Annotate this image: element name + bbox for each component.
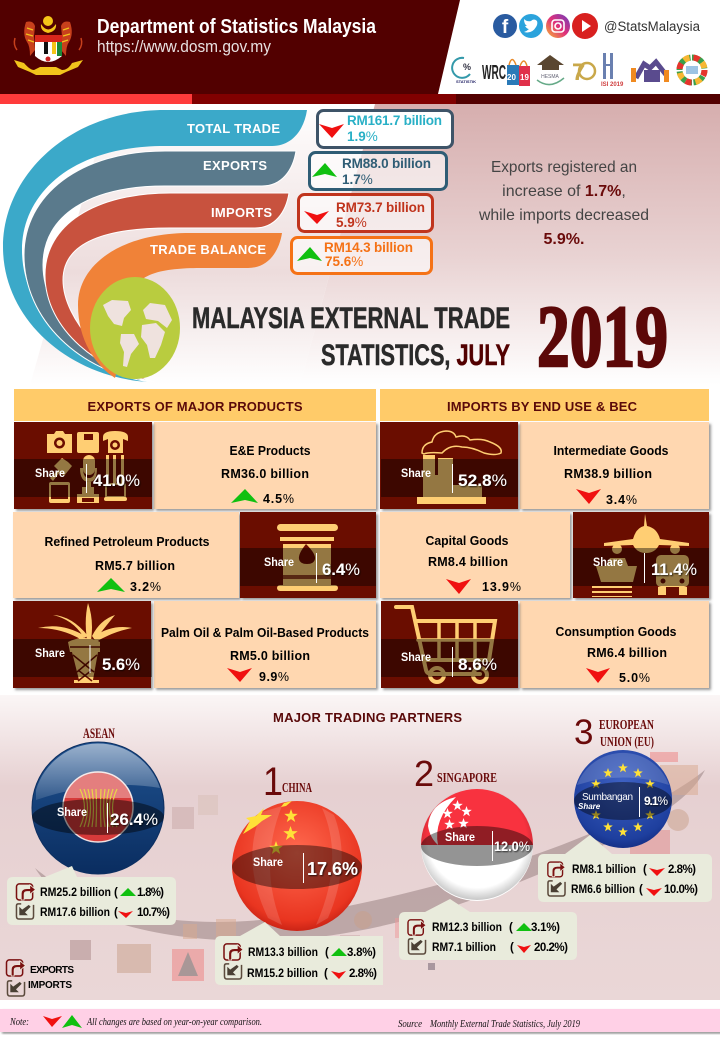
card: consumption goods: RM6.4 billion	[587, 646, 667, 660]
summary text: 5.9%.	[544, 231, 584, 248]
stat box: total trade: 1.9%	[347, 129, 378, 144]
card: consumption goods: Consumption Goods	[556, 625, 677, 639]
partner: European Union	[538, 713, 712, 902]
callout: Singapore trade: 20.2%)	[534, 942, 568, 954]
callout: EU trade: RM8.1 billion	[572, 864, 636, 876]
heading: exports of major products	[14, 389, 376, 421]
callout: EU trade: (	[639, 884, 643, 896]
label: imports: IMPORTS	[211, 205, 272, 220]
card: refined petroleum: RM5.7 billion	[95, 559, 175, 573]
sphere: ASEAN flag: 26.4%	[110, 810, 158, 829]
icon: plane, ship and bus	[592, 514, 689, 597]
stat box: imports: RM73.7 billion	[336, 200, 425, 215]
legend: exports and imports: EXPORTS	[30, 965, 74, 976]
callout: Singapore trade	[399, 899, 577, 960]
sphere: Singapore flag	[421, 788, 533, 901]
icon: electronics	[47, 431, 128, 503]
stat box: exports	[310, 152, 446, 190]
card: capital goods: RM8.4 billion	[428, 555, 508, 569]
partner: China	[215, 760, 383, 985]
legend: exports and imports: IMPORTS	[28, 980, 72, 991]
card: E&E products: 41.0%	[93, 471, 140, 490]
heading: exports of major products: EXPORTS OF MAJOR PRODUCTS	[88, 399, 303, 414]
card: refined petroleum: Refined Petroleum Products	[44, 535, 210, 549]
icon: shopping cart	[396, 607, 495, 682]
card: intermediate goods: Share	[401, 468, 431, 480]
callout: Singapore trade: RM7.1 billion	[432, 942, 496, 954]
partner logos: 7	[572, 59, 585, 86]
card: consumption goods: 5.0%	[619, 671, 650, 685]
stat box: imports: 5.9%	[336, 215, 367, 230]
partner logos	[452, 53, 704, 88]
stat box: imports	[298, 194, 432, 232]
callout: China trade: (	[325, 947, 329, 959]
header url: https://www.dosm.gov.my	[97, 38, 272, 56]
title year: 2019	[537, 289, 668, 386]
card: consumption goods: Share	[401, 652, 431, 664]
sphere: EU flag: 9.1%	[644, 794, 668, 808]
partner: European Union: UNION (EU)	[600, 735, 654, 750]
card: intermediate goods: Intermediate Goods	[554, 444, 669, 458]
card: refined petroleum: Share	[264, 557, 294, 569]
legend: exports and imports	[6, 960, 74, 996]
heading: imports by end use: IMPORTS BY END USE & BEC	[447, 399, 638, 414]
stat box: trade balance	[292, 238, 432, 274]
callout: ASEAN trade: (	[114, 907, 118, 919]
header band	[0, 0, 720, 104]
partner: ASEAN: ASEAN	[83, 726, 115, 742]
card: refined petroleum: 3.2%	[130, 580, 161, 594]
card: E&E products: E&E Products	[230, 444, 311, 458]
callout: ASEAN trade: 10.7%)	[137, 907, 170, 919]
label: exports: EXPORTS	[203, 158, 267, 173]
stat box: trade balance: 75.6%	[325, 254, 363, 269]
card: palm oil: RM5.0 billion	[230, 649, 310, 663]
summary text: increase of 1.7%,	[502, 183, 626, 200]
card: capital goods: 13.9%	[482, 580, 521, 594]
callout: Singapore trade: 3.1%)	[531, 922, 560, 934]
callout: Singapore trade: (	[510, 942, 514, 954]
sphere: China flag: 17.6%	[307, 859, 358, 879]
sphere: China flag	[232, 801, 362, 931]
card: refined petroleum: 6.4%	[322, 560, 360, 579]
footer note bar	[0, 1009, 720, 1032]
icon: globe	[90, 277, 180, 379]
card: palm oil: Palm Oil & Palm Oil-Based Products	[161, 626, 369, 640]
band: total trade	[3, 110, 307, 382]
summary text: Exports registered an	[491, 159, 637, 176]
summary text	[478, 159, 649, 248]
band: exports	[24, 151, 296, 382]
stat box: total trade: RM161.7 billion	[347, 113, 442, 128]
partner logos: WRC	[482, 62, 506, 84]
sphere: ASEAN flag: Share	[57, 807, 87, 819]
partner logos: %	[463, 62, 471, 72]
label: total trade: TOTAL TRADE	[187, 121, 280, 136]
callout: EU trade: (	[643, 864, 647, 876]
stat box: exports: RM88.0 billion	[342, 156, 431, 171]
callout: EU trade: 10.0%)	[664, 884, 698, 896]
card: E&E products: RM36.0 billion	[221, 467, 309, 481]
partner: Singapore: 2	[414, 753, 434, 794]
social media icons: f	[502, 17, 509, 38]
stat box: trade balance: RM14.3 billion	[324, 240, 413, 255]
social media icons	[493, 13, 598, 39]
card: consumption goods: 8.6%	[458, 655, 497, 674]
callout: China trade: RM15.2 billion	[247, 968, 318, 980]
card: E&E products: 4.5%	[263, 492, 294, 506]
sphere: Singapore flag: 12.0%	[494, 838, 530, 854]
sphere: China flag: Share	[253, 857, 283, 869]
card: palm oil	[13, 601, 376, 688]
summary text: while imports decreased	[478, 207, 649, 224]
header title: Department of Statistics Malaysia	[97, 16, 377, 38]
sphere: EU flag: Sumbangan	[582, 792, 633, 803]
card: capital goods	[380, 512, 709, 598]
social handle: @StatsMalaysia	[604, 19, 700, 34]
callout: China trade	[215, 922, 383, 985]
footer note bar: Monthly External Trade Statistics, July 2019	[429, 1019, 580, 1030]
icon: palm tree	[38, 603, 132, 683]
callout: ASEAN trade	[7, 866, 176, 925]
card: palm oil: 5.6%	[102, 655, 140, 674]
card: capital goods: Share	[593, 557, 623, 569]
footer note bar: Note:	[9, 1017, 29, 1028]
partner: China: CHINA	[282, 781, 313, 796]
band: imports	[45, 193, 289, 382]
partner logos: HESMA	[541, 74, 560, 80]
partner logos: STATISTIK	[456, 79, 476, 84]
callout: Singapore trade: (	[509, 922, 513, 934]
icon: oil barrel	[277, 524, 338, 591]
footer note bar: Source	[398, 1019, 422, 1030]
footer note bar: All changes are based on year-on-year comparison.	[86, 1017, 262, 1028]
stat box: exports: 1.7%	[342, 172, 373, 187]
title	[192, 302, 510, 372]
card: palm oil: 9.9%	[259, 670, 289, 684]
band: trade balance	[78, 233, 282, 378]
partner: China: 1	[263, 760, 283, 804]
callout: China trade: RM13.3 billion	[248, 947, 318, 959]
callout: ASEAN trade: RM25.2 billion	[40, 887, 111, 899]
card: E&E products: Share	[35, 468, 65, 480]
callout: ASEAN trade: (	[114, 887, 118, 899]
swoosh graphic with globe	[3, 110, 307, 382]
sphere: EU flag: Share	[578, 802, 601, 811]
label: trade balance: TRADE BALANCE	[150, 242, 266, 257]
card: E&E products	[14, 422, 376, 509]
heading: major trading partners: MAJOR TRADING PARTNERS	[273, 710, 462, 725]
heading: imports by end use	[380, 389, 709, 421]
callout: EU trade: RM6.6 billion	[571, 884, 635, 896]
card: intermediate goods: 3.4%	[606, 493, 637, 507]
card: consumption goods	[381, 601, 709, 688]
partner: European Union: EUROPEAN	[599, 718, 654, 733]
partner logos: 20	[507, 73, 516, 82]
sphere: Singapore flag: Share	[445, 832, 475, 844]
partner: Singapore: SINGAPORE	[437, 771, 497, 786]
background: upper section	[30, 104, 720, 385]
card: palm oil: Share	[35, 648, 65, 660]
partner: Singapore	[399, 753, 577, 960]
card: intermediate goods	[380, 422, 709, 509]
card: intermediate goods: RM38.9 billion	[564, 467, 652, 481]
partner logos: 19	[520, 73, 529, 82]
callout: China trade: 2.8%)	[349, 968, 377, 980]
card: capital goods: Capital Goods	[426, 534, 509, 548]
callout: EU trade: 2.8%)	[668, 864, 696, 876]
callout: ASEAN trade: RM17.6 billion	[40, 907, 110, 919]
icon: national crest	[14, 16, 83, 75]
callout: EU trade	[538, 835, 712, 902]
background: partners section	[0, 695, 720, 1000]
sphere: EU flag	[574, 750, 672, 848]
title: MALAYSIA EXTERNAL TRADE	[192, 302, 510, 335]
stat box: total trade	[318, 110, 452, 148]
card: capital goods: 11.4%	[651, 560, 697, 579]
callout: ASEAN trade: 1.8%)	[137, 887, 164, 899]
partner logos: ISI 2019	[601, 82, 624, 88]
partner: European Union: 3	[574, 713, 593, 752]
title: STATISTICS, JULY	[321, 339, 510, 372]
sphere: ASEAN flag	[32, 742, 164, 874]
card: refined petroleum	[13, 512, 376, 598]
partner: ASEAN	[7, 726, 176, 925]
callout: China trade: (	[324, 968, 328, 980]
callout: Singapore trade: RM12.3 billion	[432, 922, 502, 934]
card: intermediate goods: 52.8%	[458, 471, 507, 490]
callout: China trade: 3.8%)	[347, 947, 376, 959]
icon: factory	[417, 431, 501, 504]
